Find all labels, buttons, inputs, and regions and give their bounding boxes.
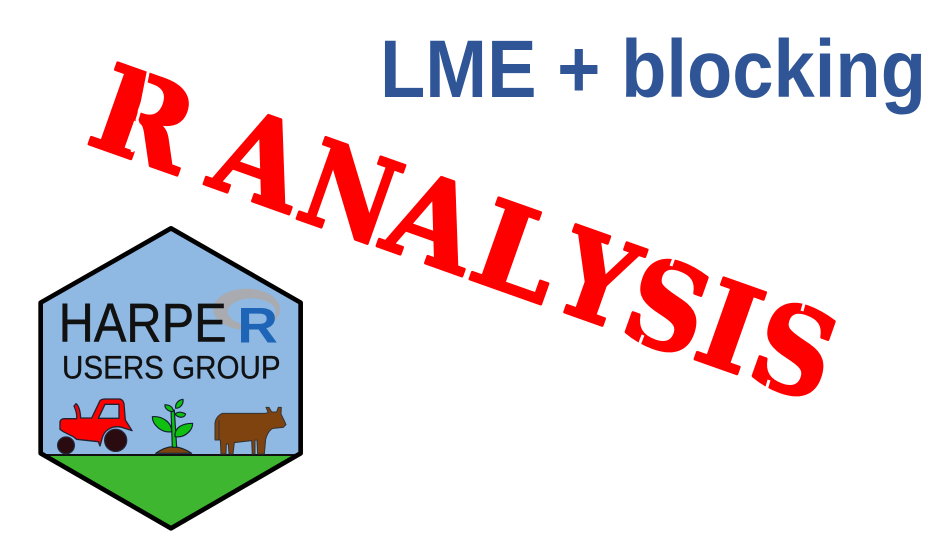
- logo text: R: R: [237, 298, 278, 354]
- stamp lettering: S: [607, 229, 728, 386]
- stamp lettering: S: [734, 273, 855, 430]
- green field: [41, 455, 301, 528]
- stamp lettering: I: [681, 252, 779, 402]
- stamp lettering: R: [75, 37, 214, 202]
- stamp: R ANALYSIS: [75, 37, 855, 430]
- icon: cow: [215, 407, 286, 454]
- icon: plant: [152, 399, 193, 453]
- stamp lettering: A: [367, 142, 500, 303]
- logo: Harper R Users Group hexagon: [41, 228, 301, 528]
- R logo ring: [213, 289, 280, 330]
- stencil cuts: [132, 68, 806, 394]
- hexagon outline: [41, 228, 301, 528]
- stamp lettering: L: [456, 172, 580, 331]
- hexagon background: [41, 228, 301, 528]
- icon: tractor: [58, 399, 132, 454]
- stamp lettering: [75, 37, 855, 430]
- stamp lettering: Y: [537, 203, 656, 358]
- logo text: USERS GROUP: USERS GROUP: [62, 348, 281, 385]
- logo text: HARPE: HARPE: [59, 292, 227, 354]
- stamp lettering: A: [194, 80, 327, 241]
- horizon line: [41, 452, 301, 458]
- stamp lettering: N: [283, 113, 417, 274]
- logo background and lettering: [41, 228, 301, 528]
